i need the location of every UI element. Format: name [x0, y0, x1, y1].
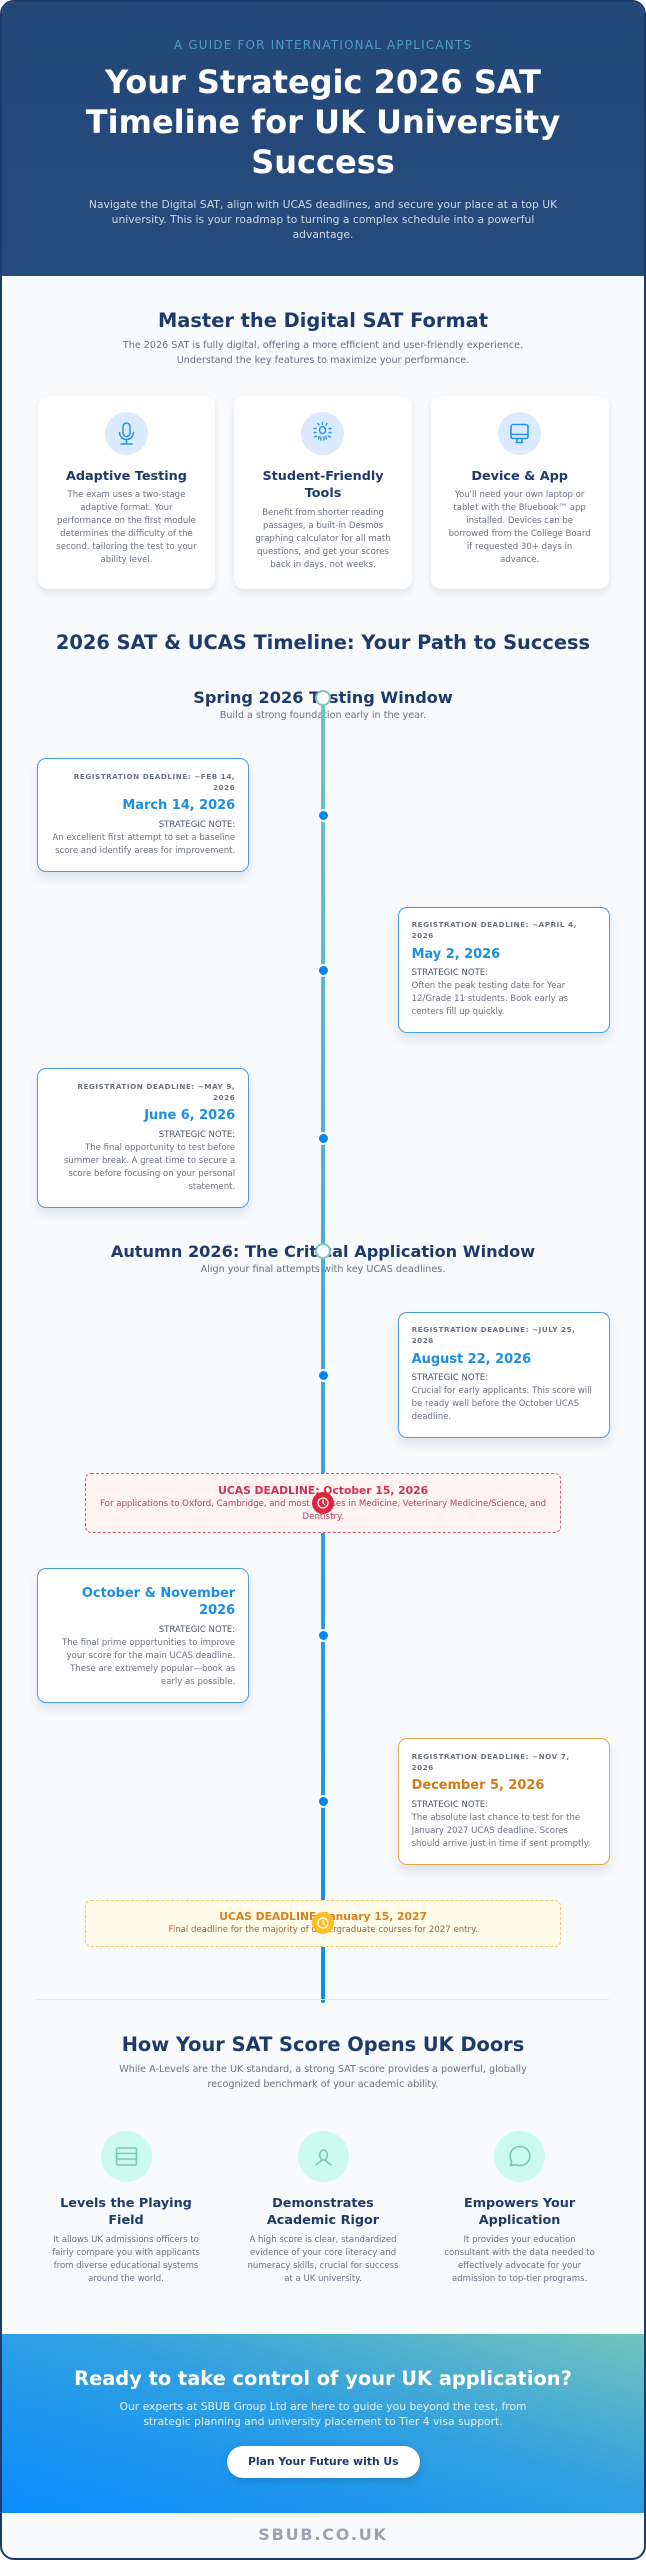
card text [56, 490, 197, 565]
CTA button: Plan Your Future with Us [248, 2455, 399, 2468]
benefit heading [464, 2196, 576, 2228]
note: These are extremely popular—book as [70, 1664, 235, 1674]
benefit text: around the world. [88, 2274, 164, 2284]
registration label: 2026 [213, 1093, 235, 1102]
callout text: Final deadline for the majority of undergraduate courses for 2027 entry. [168, 1925, 478, 1935]
CTA heading: Ready to take control of your UK application? [74, 2367, 572, 2390]
icon: microphone [105, 412, 148, 455]
CTA text: strategic planning and university placement to Tier 4 visa support. [143, 2415, 503, 2428]
note: early as possible. [161, 1677, 235, 1687]
date: June 6, 2026 [144, 1108, 235, 1123]
dot: june [316, 1132, 330, 1144]
benefit text: It provides your education [463, 2235, 576, 2245]
note: STRATEGIC NOTE: [412, 968, 488, 978]
registration label: REGISTRATION DEADLINE: ~NOV 7, [412, 1752, 570, 1761]
date: August 22, 2026 [412, 1352, 531, 1367]
benefit text: numeracy skills, crucial for success [248, 2261, 398, 2271]
footer brand: SBUB.CO.UK [258, 2525, 388, 2544]
card text: The exam uses a two-stage [68, 490, 185, 500]
registration label: REGISTRATION DEADLINE: ~MAY 9, [77, 1082, 235, 1091]
card text: second, tailoring the test to your [56, 542, 197, 552]
card text: Benefit from shorter reading [262, 508, 384, 518]
title: Success [251, 143, 395, 181]
panel: device and app [431, 396, 609, 589]
callout text: For applications to Oxford, Cambridge, and most courses in Medicine, Veterinary Medicine/Science, and [100, 1498, 546, 1508]
note: STRATEGIC NOTE: [159, 820, 235, 830]
benefit heading: Academic Rigor [267, 2213, 379, 2228]
note [52, 820, 235, 856]
card: december [398, 1738, 610, 1865]
note: Often the peak testing date for Year [412, 981, 565, 991]
card heading: Tools [305, 486, 341, 501]
registration label [74, 772, 235, 792]
date [82, 1586, 236, 1618]
heading: master the digital SAT format: Master the Digital SAT Format [158, 309, 488, 332]
card text [255, 508, 391, 570]
benefit heading: Levels the Playing [60, 2196, 192, 2211]
CTA button [227, 2446, 420, 2478]
card heading [262, 469, 384, 501]
text: format intro: Understand the key features to maximize your performance. [177, 355, 469, 366]
timeline line [321, 696, 325, 2003]
benefit text: evidence of your core literacy and [250, 2248, 396, 2258]
card text: adaptive format. Your [80, 503, 173, 513]
card text: determines the difficulty of the [60, 529, 193, 539]
note: The final prime opportunities to improve [62, 1638, 235, 1648]
divider [37, 1999, 609, 2000]
callout text: Dentistry. [303, 1512, 344, 1522]
note: STRATEGIC NOTE: [159, 1625, 235, 1635]
panel: adaptive testing [38, 396, 215, 589]
date: March 14, 2026 [122, 798, 235, 813]
node: autumn [315, 1243, 331, 1259]
card text: if requested 30+ days in [467, 542, 572, 552]
card text: back in days, not weeks. [270, 560, 376, 570]
benefit text: A high score is clear, standardized [249, 2235, 397, 2245]
card heading: Device & App [471, 469, 568, 484]
callout heading: UCAS DEADLINE: October 15, 2026 [218, 1484, 428, 1496]
registration label: REGISTRATION DEADLINE: ~APRIL 4, [412, 920, 577, 929]
CTA text [120, 2400, 526, 2428]
benefit text [248, 2235, 398, 2284]
note: STRATEGIC NOTE: [159, 1130, 235, 1140]
title: Your Strategic 2026 SAT [105, 63, 541, 101]
note [64, 1130, 235, 1192]
title: Timeline for UK University [86, 103, 560, 141]
intro text: university. This is your roadmap to turning a complex schedule into a powerful [112, 213, 534, 226]
panel: header [0, 0, 646, 276]
callout: january UCAS deadline [85, 1900, 561, 1947]
text: autumn subtitle: Align your final attempts with key UCAS deadlines. [201, 1264, 445, 1275]
benefit heading [60, 2196, 192, 2228]
panel: call to action [0, 2334, 646, 2513]
text: benefits intro [119, 2064, 527, 2090]
card text [449, 490, 591, 565]
text: spring subtitle: Build a strong foundation early in the year. [220, 710, 426, 721]
note [412, 1373, 592, 1422]
benefit text: consultant with the data needed to [444, 2248, 595, 2258]
card text: performance on the first module [57, 516, 196, 526]
benefit heading: Field [108, 2213, 144, 2228]
icon: speech bubble [494, 2131, 545, 2182]
note: January 2027 UCAS deadline. Scores [412, 1826, 568, 1836]
card text: graphing calculator for all math [255, 534, 391, 544]
registration label: 2026 [412, 931, 434, 940]
icon: red clock [312, 1492, 334, 1514]
note: An excellent first attempt to set a baseline [52, 833, 235, 843]
icon: amber clock [312, 1912, 334, 1934]
benefit heading: Application [479, 2213, 560, 2228]
note: 12/Grade 11 students. Book early as [412, 994, 568, 1004]
date: October & November [82, 1586, 235, 1601]
card heading: Adaptive Testing [66, 469, 187, 484]
benefit text: It allows UK admissions officers to [53, 2235, 199, 2245]
card text: tablet with the Bluebook™ app [453, 503, 586, 513]
benefit text [52, 2235, 200, 2284]
note: deadline. [412, 1412, 451, 1422]
heading: autumn window: Autumn 2026: The Critical Application Window [111, 1242, 535, 1261]
note [62, 1625, 235, 1687]
registration label: REGISTRATION DEADLINE: ~FEB 14, [74, 772, 235, 781]
benefit text: at a UK university. [284, 2274, 362, 2284]
node: spring [315, 690, 331, 706]
heading: spring window: Spring 2026 Testing Window [193, 688, 453, 707]
note: Crucial for early applicants. This score will [412, 1386, 592, 1396]
text: benefits intro: recognized benchmark of your academic ability. [207, 2079, 438, 2090]
panel: empowers your application [444, 2131, 595, 2284]
note: The final opportunity to test before [85, 1143, 235, 1153]
note [412, 968, 568, 1017]
date: 2026 [199, 1603, 235, 1618]
note: centers fill up quickly. [412, 1007, 504, 1017]
note: STRATEGIC NOTE: [412, 1373, 488, 1383]
panel: demonstrates academic rigor [248, 2131, 398, 2284]
note: statement. [188, 1182, 235, 1192]
dot: august [316, 1368, 330, 1382]
intro text: Navigate the Digital SAT, align with UCAS deadlines, and secure your place at a top UK [89, 198, 557, 211]
note: should arrive just in time if sent promptly. [412, 1839, 590, 1849]
dot: may [316, 964, 330, 976]
CTA text: Our experts at SBUB Group Ltd are here to guide you beyond the test, from [120, 2400, 526, 2413]
card text: questions, and get your scores [257, 547, 389, 557]
text: format intro [122, 340, 523, 366]
registration label [412, 920, 577, 940]
registration label: 2026 [412, 1763, 434, 1772]
icon: cards [100, 2131, 152, 2182]
benefit text: admission to top-tier programs. [452, 2274, 587, 2284]
card text: ability level. [100, 555, 152, 565]
note: be ready well before the October UCAS [412, 1399, 579, 1409]
card text: advance. [500, 555, 539, 565]
panel: student-friendly tools [234, 396, 412, 589]
note: summer break. A great time to secure a [64, 1156, 235, 1166]
card text: installed. Devices can be [466, 516, 573, 526]
heading: timeline: 2026 SAT & UCAS Timeline: Your Path to Success [56, 631, 590, 654]
note: your score for the main UCAS deadline. [67, 1651, 235, 1661]
card text: passages, a built-in Desmos [263, 521, 383, 531]
benefit text [444, 2235, 595, 2284]
benefit text: fairly compare you with applicants [52, 2248, 200, 2258]
card: march [37, 758, 249, 872]
benefit heading: Empowers Your [464, 2196, 575, 2211]
heading: how your SAT score opens UK doors: How Your SAT Score Opens UK Doors [122, 2033, 524, 2056]
registration label: 2026 [412, 1336, 434, 1345]
date: December 5, 2026 [412, 1778, 544, 1793]
intro text [89, 198, 558, 241]
benefit heading: Demonstrates [272, 2196, 374, 2211]
registration label [412, 1325, 575, 1345]
callout text [100, 1498, 546, 1522]
callout: october UCAS deadline [85, 1473, 561, 1533]
registration label [412, 1752, 570, 1772]
icon: monitor [498, 412, 541, 455]
registration label [77, 1082, 235, 1102]
icon: bright bulb [301, 412, 344, 455]
note: The absolute last chance to test for the [412, 1813, 580, 1823]
icon: person [298, 2131, 348, 2182]
benefit text: from diverse educational systems [54, 2261, 198, 2271]
card: june [37, 1068, 249, 1208]
title [86, 63, 560, 181]
eyebrow: A GUIDE FOR INTERNATIONAL APPLICANTS [174, 38, 472, 52]
dot: october november [316, 1629, 330, 1642]
intro text: advantage. [293, 228, 353, 241]
registration label: REGISTRATION DEADLINE: ~JULY 25, [412, 1325, 575, 1334]
card text: You'll need your own laptop or [455, 490, 584, 500]
dot: december [316, 1795, 330, 1808]
text: format intro: The 2026 SAT is fully digital, offering a more efficient and user-friendly experience. [123, 340, 523, 351]
note: STRATEGIC NOTE: [412, 1800, 488, 1810]
benefit heading [267, 2196, 379, 2228]
callout heading: UCAS DEADLINE: January 15, 2027 [219, 1910, 427, 1923]
dot: march [316, 808, 330, 822]
note [411, 1800, 590, 1849]
note: score before focusing on your personal [68, 1169, 235, 1179]
panel: levels the playing field [52, 2131, 200, 2284]
card: august [398, 1312, 610, 1438]
card: may [398, 907, 610, 1033]
benefit text: effectively advocate for your [458, 2261, 581, 2271]
text: benefits intro: While A-Levels are the UK standard, a strong SAT score provides a powerful, globally [119, 2064, 527, 2075]
date: May 2, 2026 [412, 947, 500, 962]
card text: borrowed from the College Board [449, 529, 591, 539]
registration label: 2026 [213, 783, 235, 792]
note: score and identify areas for improvement. [55, 846, 235, 856]
card: october november [37, 1568, 249, 1703]
card heading: Student-Friendly [262, 469, 384, 484]
